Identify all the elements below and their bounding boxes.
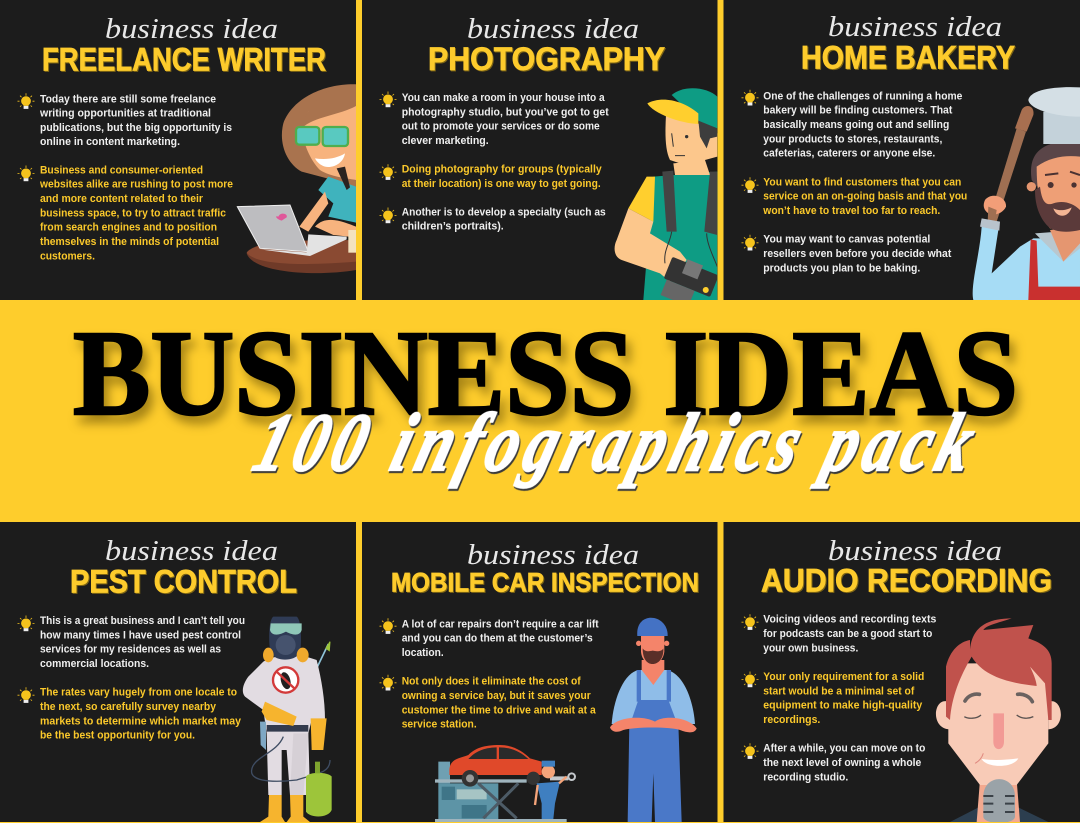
text block: white paragraph: recording studio. [763, 771, 848, 783]
icon: light bulb [742, 672, 758, 687]
text block: white paragraph: your own business. [763, 642, 858, 654]
main title: business ideas: BUSINESS IDEAS [73, 306, 1018, 441]
illustration: baker [973, 87, 1080, 300]
illustration: mechanic with overalls [435, 618, 697, 822]
text block: yellow paragraph: You want to find customers that you can [763, 176, 962, 188]
text block: white paragraph: services for my residences as well as [40, 644, 221, 656]
icon: light bulb [18, 616, 34, 631]
text block: white paragraph: your products to stores, restaurants, [763, 133, 942, 145]
text block: white paragraph [763, 743, 926, 783]
text block: yellow paragraph [402, 164, 603, 190]
text block: white paragraph: resellers even before you decide what [763, 248, 952, 260]
heading: home bakery: HOME BAKERY [801, 39, 1015, 75]
text block: yellow paragraph: customer the time to drive and wait at a [402, 704, 597, 716]
text block: yellow paragraph [39, 164, 233, 262]
text block: white paragraph: publications, but the big opportunity is [40, 122, 232, 134]
text block: white paragraph [402, 206, 606, 233]
icon: light bulb [742, 177, 758, 193]
text block: white paragraph: and you can do them at the customer’s [402, 633, 593, 645]
text block: yellow paragraph: customers. [40, 250, 95, 262]
panel: home bakery [724, 0, 1080, 300]
text block: white paragraph: the next level of owning a whole [763, 757, 921, 769]
text block: white paragraph [402, 92, 609, 147]
icon: light bulb [18, 166, 34, 181]
heading: audio recording: AUDIO RECORDING [761, 563, 1052, 599]
text block: yellow paragraph: equipment to make high-quality [763, 700, 923, 712]
text block: yellow paragraph: at their location) is one way to get going. [402, 178, 601, 190]
text block: white paragraph: for podcasts can be a good start to [763, 628, 933, 640]
panel: audio recording [724, 522, 1080, 823]
text block: white paragraph [39, 93, 232, 148]
text block: white paragraph: Voicing videos and recording texts [763, 614, 936, 626]
text block: white paragraph: You can make a room in your house into a [402, 92, 606, 104]
text block: yellow paragraph: the next, so carefully survey nearby [40, 701, 217, 713]
text block: white paragraph: One of the challenges of running a home [763, 90, 962, 102]
illustration: pest control worker [243, 617, 332, 822]
text block: yellow paragraph: themselves in the minds of potential [40, 236, 219, 248]
text block: white paragraph: products you plan to be baking. [763, 262, 920, 274]
text block: yellow paragraph: business space, to try to attract traffic [40, 207, 226, 219]
script heading: business idea: business idea [467, 540, 639, 571]
script heading: business idea: business idea [828, 12, 1002, 43]
panel: pest control [0, 522, 356, 822]
text block: white paragraph: clever marketing. [402, 135, 489, 147]
script heading: business idea: business idea [105, 14, 278, 45]
text block: white paragraph: You may want to canvas potential [763, 234, 930, 246]
text block: yellow paragraph: markets to determine which market may [40, 715, 242, 727]
text block: white paragraph [402, 618, 599, 659]
text block: yellow paragraph [763, 671, 924, 726]
panel: mobile car inspection [362, 522, 718, 822]
icon: light bulb [380, 164, 396, 180]
icon: light bulb [380, 618, 396, 634]
text block: yellow paragraph: service on an on-going basis and that you [763, 191, 967, 203]
icon: light bulb [18, 687, 34, 703]
icon: light bulb [380, 92, 396, 107]
heading: freelance writer: FREELANCE WRITER [42, 42, 326, 78]
heading: mobile car inspection: MOBILE CAR INSPECTION [391, 568, 699, 598]
text block: white paragraph: photography studio, but you’ve got to get [402, 106, 609, 118]
illustration: photographer [615, 88, 720, 313]
text block: white paragraph: how many times I have used pest control [40, 629, 241, 641]
icon: light bulb [742, 90, 758, 106]
text block: white paragraph: Another is to develop a specialty (such as [402, 206, 606, 218]
text block: yellow paragraph: Business and consumer-oriented [40, 164, 203, 176]
text block: yellow paragraph [40, 687, 242, 742]
script heading: business idea: business idea [105, 536, 278, 567]
text block: white paragraph: This is a great business and I can’t tell you [40, 615, 245, 627]
script heading: business idea: business idea [467, 14, 639, 45]
heading: pest control: PEST CONTROL [70, 563, 297, 599]
text block: yellow paragraph: recordings. [763, 714, 820, 726]
text block: white paragraph [40, 615, 245, 670]
text block: yellow paragraph: owning a service bay, but it saves your [402, 690, 591, 702]
text block: yellow paragraph: websites alike are rushing to post more [39, 179, 233, 191]
icon: light bulb [380, 208, 396, 223]
text block: yellow paragraph: service station. [402, 719, 477, 731]
text block: yellow paragraph: be the best opportunity for you. [40, 730, 195, 742]
script heading: business idea: business idea [828, 536, 1002, 567]
text block: white paragraph: After a while, you can move on to [763, 743, 926, 755]
banner: yellow title band [0, 300, 1080, 521]
text block: white paragraph: location. [402, 647, 444, 659]
text block: yellow paragraph [402, 676, 597, 731]
text block: white paragraph: out to promote your services or do some [402, 121, 600, 133]
text block: yellow paragraph: The rates vary hugely from one locale to [40, 687, 237, 699]
icon: light bulb [742, 235, 758, 250]
text block: yellow paragraph: Your only requirement for a solid [763, 671, 924, 683]
text block: yellow paragraph: and more content related to their [40, 193, 204, 205]
icon: light bulb [18, 93, 34, 109]
text block: white paragraph: bakery will be finding customers. That [763, 105, 953, 117]
text block: white paragraph: writing opportunities at traditional [39, 108, 211, 120]
text block: yellow paragraph [762, 176, 967, 217]
text block: white paragraph: A lot of car repairs don’t require a car lift [402, 618, 599, 630]
text block: white paragraph: cafeterias, caterers or anyone else. [763, 148, 935, 160]
panel: freelance writer [0, 0, 358, 300]
heading: photography: PHOTOGRAPHY [428, 41, 665, 77]
text block: white paragraph: basically means going out and selling [763, 119, 949, 131]
text block: white paragraph [763, 90, 962, 160]
text block: white paragraph [763, 234, 952, 274]
text block: yellow paragraph: start would be a minimal set of [763, 685, 915, 697]
text block: white paragraph: online in content marketing. [40, 136, 180, 148]
text block: yellow paragraph: Doing photography for groups (typically [402, 164, 603, 176]
illustration: woman with laptop [237, 84, 358, 273]
text block: yellow paragraph: Not only does it eliminate the cost of [402, 676, 581, 688]
text block: white paragraph: commercial locations. [40, 658, 149, 670]
text block: white paragraph: Today there are still some freelance [40, 93, 216, 105]
icon: light bulb [380, 675, 396, 690]
icon: light bulb [742, 743, 758, 759]
text block: yellow paragraph: from search engines and to position [40, 222, 217, 234]
illustration: man with microphone [936, 618, 1061, 823]
text block: white paragraph: children’s portraits). [402, 221, 504, 233]
panel: photography [362, 0, 720, 313]
text block: yellow paragraph: won’t have to travel too far to reach. [762, 205, 940, 217]
subtitle: 100 infographics pack: 100 infographics pack [245, 398, 985, 488]
icon: light bulb [742, 614, 758, 630]
text block: white paragraph [763, 614, 936, 654]
